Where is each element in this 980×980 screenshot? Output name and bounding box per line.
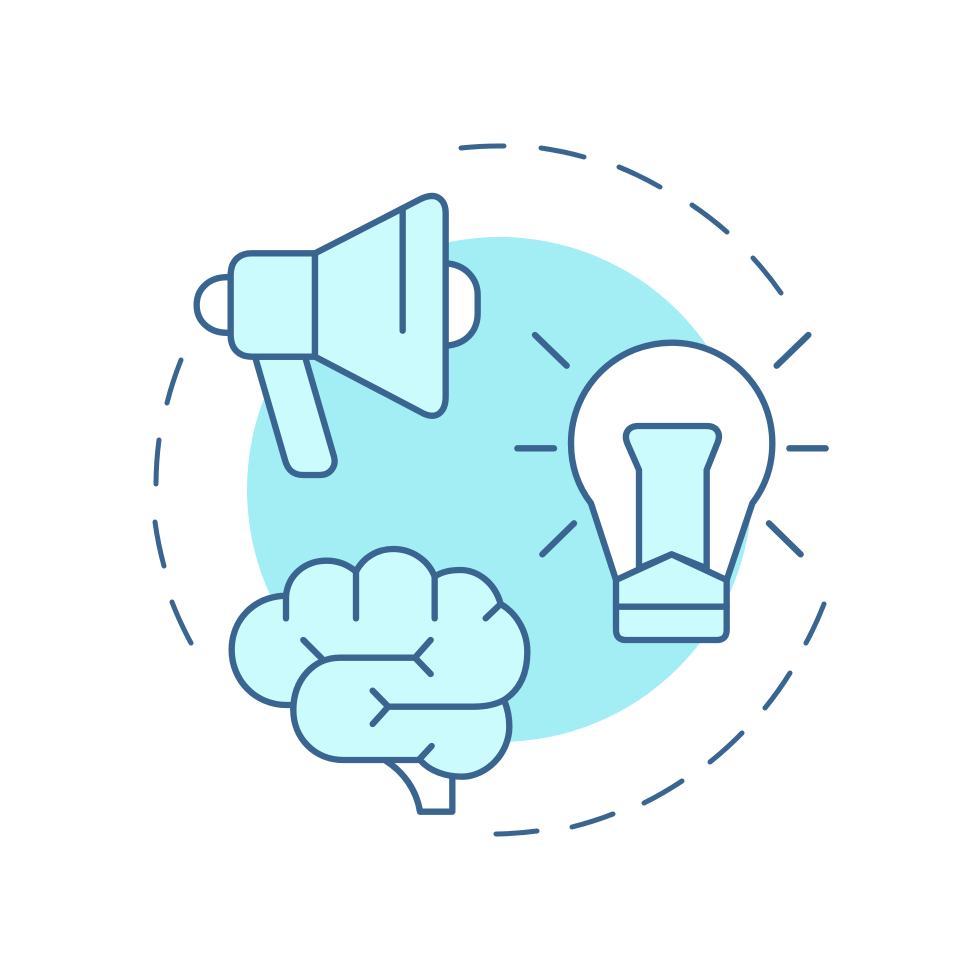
brain outline xyxy=(232,549,527,777)
bulb screw base xyxy=(616,554,727,640)
megaphone horn xyxy=(315,196,446,416)
megaphone rear cap xyxy=(197,277,230,333)
bulb glass xyxy=(571,343,772,580)
bulb base band xyxy=(616,597,727,616)
icon: light bulb xyxy=(517,335,826,640)
megaphone horn line xyxy=(393,210,412,331)
icon: brain xyxy=(232,549,527,812)
megaphone front cap xyxy=(445,263,478,346)
brain stem xyxy=(386,761,452,812)
dashed orbit ring xyxy=(155,146,824,834)
bulb light rays xyxy=(517,335,826,554)
megaphone handle xyxy=(255,357,335,475)
megaphone body xyxy=(231,253,315,357)
brain folds xyxy=(286,572,504,759)
background circle xyxy=(247,237,752,742)
bulb filament xyxy=(626,426,719,568)
icon: megaphone xyxy=(197,196,478,475)
